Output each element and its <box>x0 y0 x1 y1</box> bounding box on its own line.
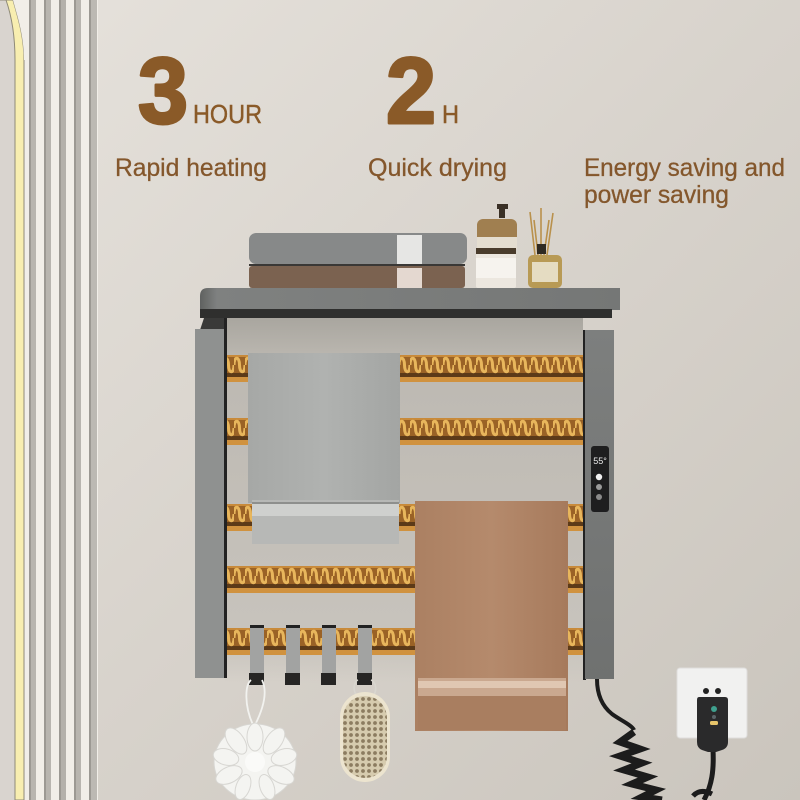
heading: 2 h: H <box>442 101 459 129</box>
text: energy saving and power saving: power saving <box>584 181 729 209</box>
text: quick drying: Quick drying <box>368 154 507 182</box>
control panel: 55° <box>593 456 607 466</box>
white bath puff <box>211 680 299 800</box>
text: energy saving and power saving <box>584 154 785 209</box>
control panel <box>591 446 609 512</box>
bottle <box>476 204 517 288</box>
right post with control panel <box>583 330 614 680</box>
shelf <box>200 288 620 330</box>
hanging gray towel <box>248 353 400 544</box>
left mirror and fluted panel <box>0 0 98 800</box>
heading: 2 h: 2 <box>386 38 436 143</box>
heading: 3 hour <box>138 38 262 143</box>
heated rails <box>223 355 584 655</box>
text: energy saving and power saving: Energy saving and <box>584 154 785 182</box>
hanging brown towel <box>415 501 568 731</box>
power cords <box>597 679 713 800</box>
rack backing shadow <box>225 318 583 683</box>
hooks <box>249 625 372 685</box>
diffuser with sticks <box>528 208 562 288</box>
wall socket <box>677 668 747 738</box>
heading: 3 hour: 3 <box>138 38 188 143</box>
body brush <box>340 680 390 782</box>
plug adapter <box>697 697 728 752</box>
left post <box>195 318 227 678</box>
heading: 3 hour: HOUR <box>193 99 262 129</box>
folded towels on shelf <box>249 233 467 288</box>
text: rapid heating: Rapid heating <box>115 154 267 182</box>
